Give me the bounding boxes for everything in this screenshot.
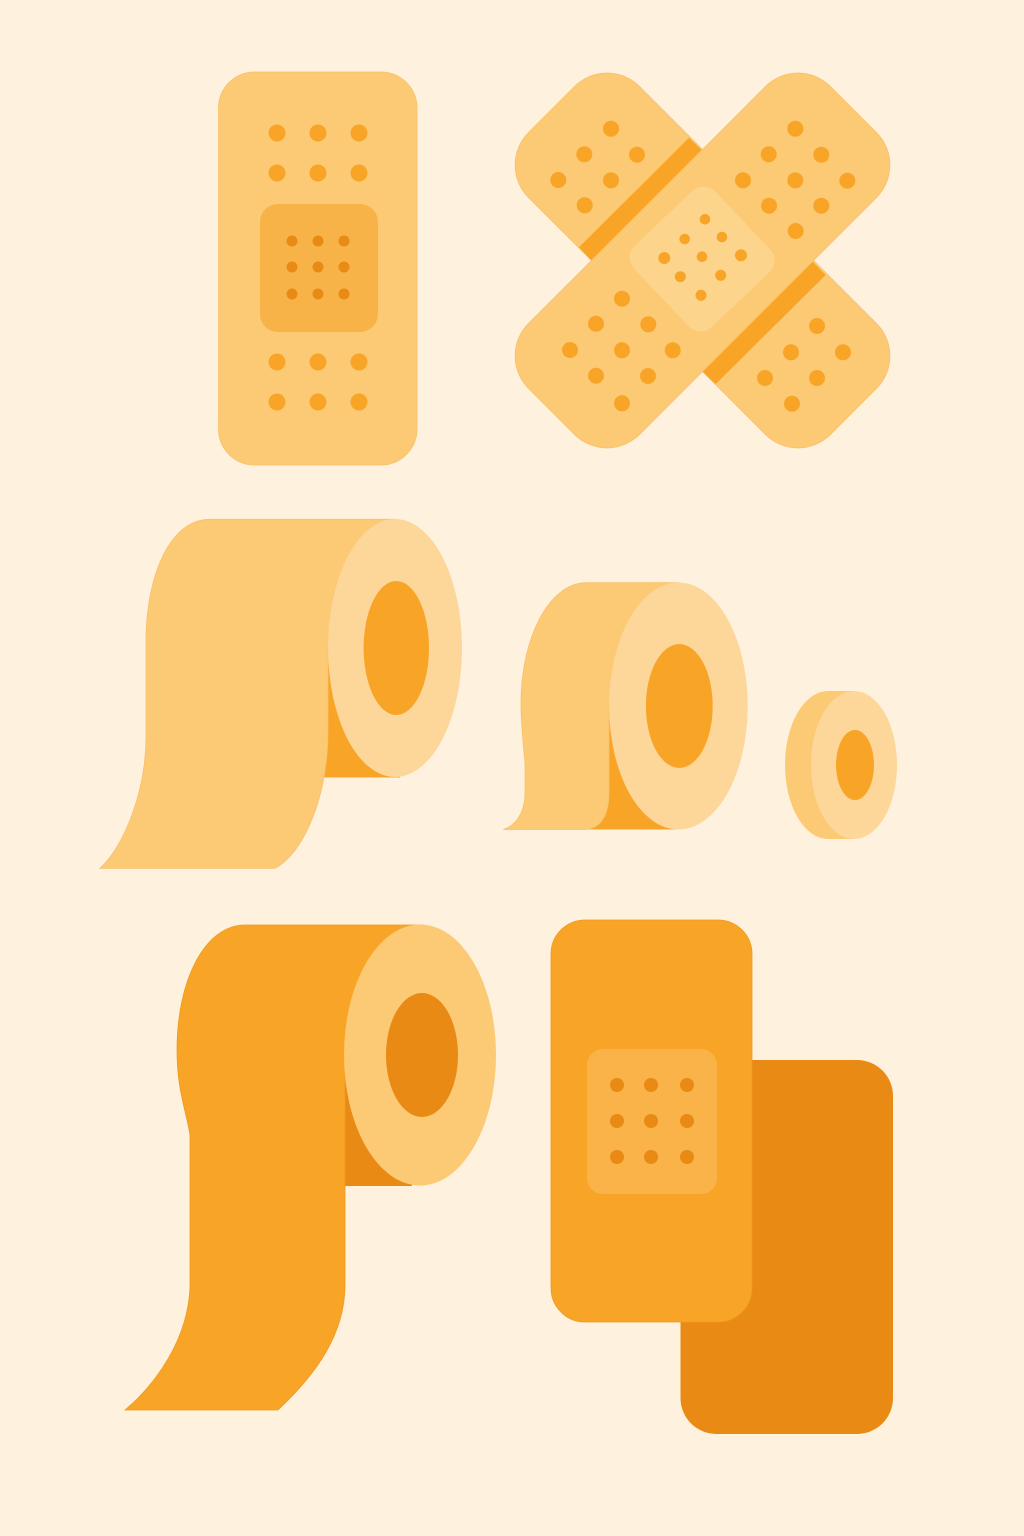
icon: large light tape roll — [100, 519, 462, 868]
icon: vertical adhesive bandage — [218, 72, 417, 465]
icon: small light tape roll — [785, 691, 897, 839]
icon: large orange tape roll — [125, 924, 496, 1410]
icon: crossed bandages — [496, 54, 909, 467]
icon: medium light tape roll — [503, 582, 748, 830]
icon: overlapping orange bandage strips — [551, 920, 893, 1434]
